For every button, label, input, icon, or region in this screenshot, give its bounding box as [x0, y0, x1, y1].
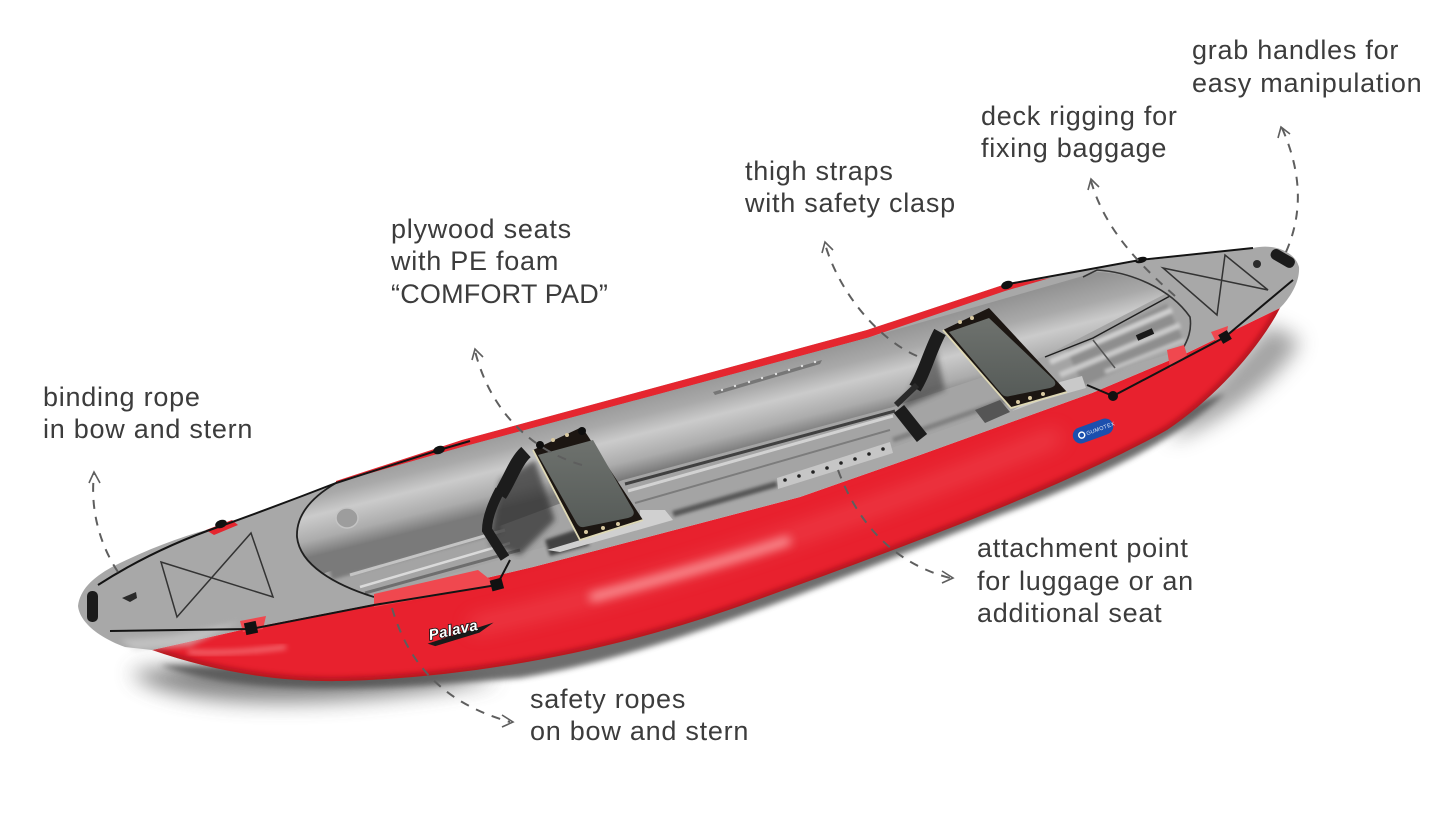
- Palava logo: [424, 614, 496, 648]
- label: attachment point: attachment point: [977, 533, 1189, 563]
- grey deck and rim: [78, 247, 1299, 650]
- bow floor tubing: [330, 525, 520, 593]
- label: thigh straps: with safety clasp: [744, 188, 956, 218]
- label: grab handles: grab handles for: [1192, 35, 1399, 65]
- long inner tube: [297, 272, 1167, 574]
- rope and fittings: [98, 248, 1293, 631]
- stern floor tubing: [1045, 296, 1185, 375]
- label: grab handles: easy manipulation: [1192, 68, 1422, 98]
- kayak illustration: [78, 247, 1300, 702]
- shadow behind rear strap: [900, 345, 945, 410]
- ground shadow: [130, 325, 1300, 702]
- red patch on rim near bow: [206, 520, 238, 535]
- bow deck rigging: [161, 533, 273, 617]
- stern knob: [1253, 260, 1261, 268]
- label: attachment point: additional seat: [977, 598, 1162, 628]
- stern deck rigging: [1163, 255, 1268, 315]
- front seat: [533, 427, 643, 540]
- blue brand badge: GUMOTEX: [1086, 421, 1116, 437]
- Palava logo: Palava: [427, 617, 480, 644]
- attachment point strip: [777, 442, 893, 489]
- bow grab handle: [87, 591, 98, 622]
- label: attachment point: for luggage or an: [977, 566, 1194, 596]
- hull highlight and underside shading: [152, 308, 1280, 681]
- label: deck rigging: fixing baggage: [981, 133, 1167, 163]
- arrow: thigh straps: [822, 242, 917, 356]
- label: plywood seats: with PE foam: [390, 246, 559, 276]
- rear seat bracket: [1012, 376, 1086, 411]
- rear thigh strap: [915, 332, 940, 388]
- label: safety ropes: on bow and stern: [530, 716, 749, 746]
- cleats: [214, 256, 1232, 635]
- floor of the cockpit: [297, 272, 1191, 597]
- far red rim: [336, 278, 1050, 485]
- shadows around front seat: [490, 460, 555, 555]
- rear seat fittings: [975, 400, 1010, 423]
- front thigh strap: [500, 452, 526, 495]
- label: binding rope: in bow and stern: [43, 414, 253, 444]
- cockpit rim line: [297, 483, 374, 597]
- rear seat: [943, 308, 1067, 408]
- label: binding rope: binding rope: [43, 382, 201, 412]
- arrow: binding rope: [89, 472, 118, 572]
- shadow below front seat: [545, 530, 590, 556]
- tube valve: [336, 508, 358, 528]
- label: plywood seats: “COMFORT PAD”: [391, 279, 608, 309]
- upper attachment strip: [713, 360, 822, 395]
- label: safety ropes: safety ropes: [530, 684, 686, 714]
- arrow: deck rigging: [1088, 179, 1175, 296]
- label: thigh straps: thigh straps: [745, 156, 894, 186]
- stern clasp fitting: [1137, 331, 1153, 338]
- arrow: plywood seats: [472, 349, 582, 465]
- bow deck shading: [120, 622, 240, 650]
- stern grab handle: [1269, 247, 1297, 270]
- mid floor ribs: [625, 395, 1020, 514]
- blue brand badge: [1071, 416, 1117, 446]
- bow knob: [122, 592, 137, 602]
- red hull side tube: [152, 308, 1280, 681]
- arrow: grab handles: [1278, 127, 1298, 252]
- arrow: attachment point: [838, 470, 953, 583]
- front seat bracket: [547, 510, 673, 552]
- red reinforcement patches: [240, 326, 1228, 632]
- label: plywood seats: plywood seats: [391, 214, 572, 244]
- label: deck rigging: deck rigging for: [981, 101, 1178, 131]
- arrow: safety ropes: [392, 608, 513, 727]
- stern cockpit rim line: [1083, 270, 1191, 350]
